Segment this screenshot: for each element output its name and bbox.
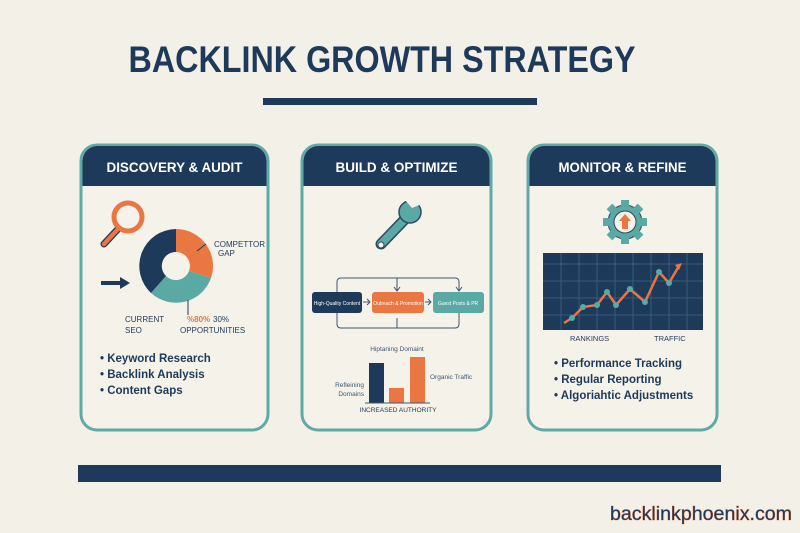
- flow diagram: [312, 278, 484, 328]
- title underline bar: [263, 98, 537, 105]
- bar chart: Refleining: [335, 382, 364, 389]
- bullet list: • Keyword Research: [100, 353, 211, 365]
- donut labels: COMPETTOR: [214, 240, 265, 249]
- bullet list: • Content Gaps: [100, 385, 183, 397]
- panel: monitor & refine: [528, 145, 717, 430]
- flow diagram: High-Quality Content: [314, 301, 361, 307]
- flow diagram: Guest Posts & PR: [438, 301, 479, 307]
- flow diagram: Outreach & Promotion: [373, 301, 423, 307]
- panel: build & optimize: [302, 145, 491, 430]
- header: build: [304, 146, 490, 186]
- bullet list: • Regular Reporting: [554, 374, 662, 386]
- donut labels: %80%: [187, 315, 210, 324]
- bullet list: • Performance Tracking: [554, 358, 682, 370]
- bullet list: [100, 353, 211, 397]
- bottom bar: [78, 465, 721, 482]
- donut chart: [139, 229, 213, 315]
- icon: gear with arrow: [603, 200, 647, 244]
- website url: backlinkphoenix.com: [610, 504, 792, 525]
- panel: discovery & audit: [81, 145, 268, 430]
- icon: wrench: [378, 196, 422, 248]
- bullet list: • Algoriahtic Adjustments: [554, 390, 693, 402]
- bar chart: Domains: [338, 391, 365, 398]
- line chart: TRAFFIC: [654, 334, 686, 343]
- icon: magnifier: [104, 203, 142, 244]
- header: discovery: DISCOVERY & AUDIT: [106, 160, 243, 175]
- bullet list: • Backlink Analysis: [100, 369, 205, 381]
- header: monitor: [530, 146, 716, 186]
- donut labels: SEO: [125, 326, 142, 335]
- donut labels: 30%: [213, 315, 229, 324]
- line chart: RANKINGS: [570, 334, 609, 343]
- bullet list: [554, 358, 693, 402]
- donut labels: OPPORTUNITIES: [180, 326, 245, 335]
- bar chart: INCREASED AUTHORITY: [360, 407, 437, 414]
- arrow: [101, 277, 130, 289]
- title: BACKLINK GROWTH STRATEGY: [128, 39, 636, 80]
- header: build: BUILD & OPTIMIZE: [336, 160, 458, 175]
- donut labels: CURRENT: [125, 315, 164, 324]
- donut labels: [125, 240, 265, 335]
- bar chart: Hiptaning Domaint: [370, 346, 424, 353]
- line chart: [543, 253, 703, 343]
- header: discovery: [82, 146, 266, 186]
- header: monitor: MONITOR & REFINE: [558, 160, 686, 175]
- bar chart: [335, 346, 473, 414]
- donut labels: GAP: [218, 249, 235, 258]
- bar chart: Organic Traffic: [430, 374, 473, 381]
